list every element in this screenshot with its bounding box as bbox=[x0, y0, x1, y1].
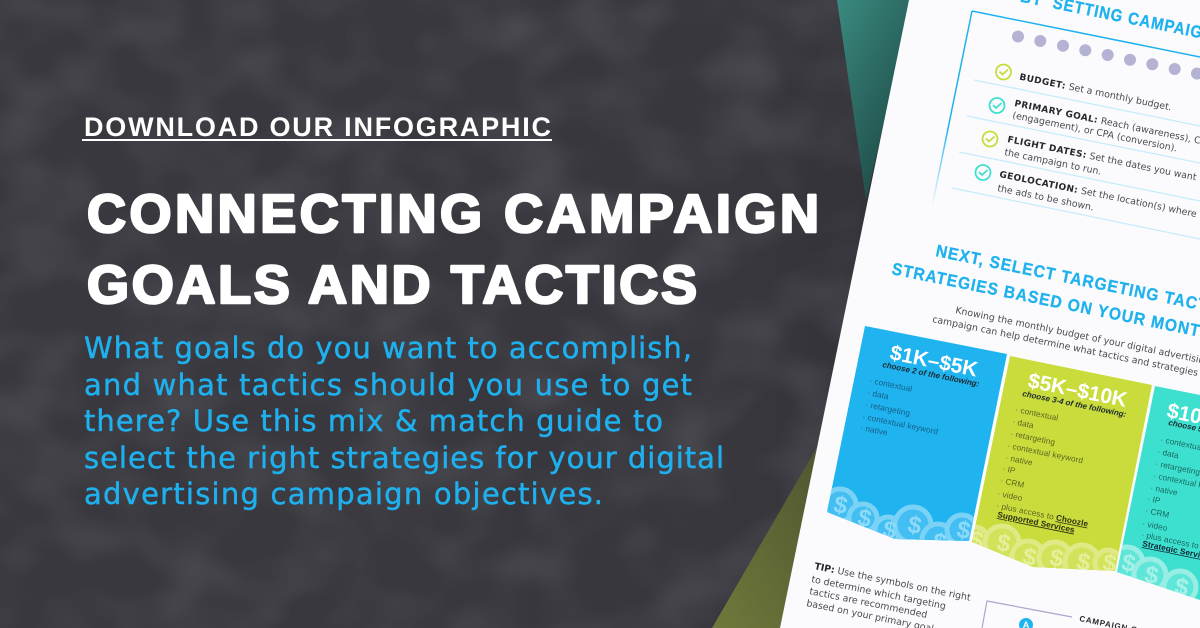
tip text: TIP: Use the symbols on the right bbox=[813, 561, 972, 604]
flight dates item: FLIGHT DATES: Set the dates you want bbox=[1006, 134, 1198, 183]
panel: $5K-$10K budget: $ bbox=[1020, 543, 1039, 572]
subtitle paragraph: and what tactics should you use to get bbox=[84, 368, 692, 402]
primary goal item: (engagement), or CPA (conversion). bbox=[1011, 110, 1178, 154]
panel: $5K-$10K budget: · retargeting bbox=[1010, 429, 1056, 447]
icon: budget check bbox=[996, 64, 1011, 80]
panel: $5K-$10K budget: $ bbox=[1074, 548, 1093, 577]
panel: $1K-$5K budget: · data bbox=[867, 388, 890, 401]
panel: $10K+ budget bbox=[1111, 386, 1200, 603]
eyebrow: download our infographic: DOWNLOAD OUR INFOGRAPHIC bbox=[84, 112, 551, 142]
document heading: campaign basics bbox=[961, 0, 1200, 58]
panel: $10K+ budget: · native bbox=[1150, 483, 1179, 498]
panel: $1K-$5K budget: choose 2 of the following: bbox=[882, 360, 980, 389]
panel: $1K-$5K budget: $ bbox=[954, 516, 973, 545]
olive background shape bbox=[712, 442, 820, 628]
intro paragraph: campaign can help determine what tactics and strategies bbox=[931, 314, 1199, 379]
icon: flight dates check bbox=[982, 132, 998, 146]
icon: geolocation check bbox=[976, 165, 990, 180]
panel: $10K+ budget: · video bbox=[1142, 519, 1169, 533]
panel: $5K-$10K budget bbox=[962, 356, 1152, 579]
panel: $1K-$5K budget: · retargeting bbox=[865, 400, 911, 418]
panel: $5K-$10K budget: · contextual keyword bbox=[1007, 441, 1084, 465]
panel: $5K-$10K budget: · CRM bbox=[1000, 476, 1025, 490]
panel: $1K-$5K budget: $ bbox=[930, 528, 949, 557]
panel: $5K-$10K budget: $ bbox=[967, 526, 986, 555]
panel: $5K-$10K budget: $ bbox=[1047, 544, 1066, 573]
panel: $5K-$10K budget: $ bbox=[1100, 549, 1119, 578]
panel: $1K-$5K budget: $1K–$5K bbox=[888, 341, 980, 382]
teal background shape bbox=[837, 0, 912, 200]
panel: $1K-$5K budget: · contextual keyword bbox=[862, 412, 939, 436]
panel: $1K-$5K budget: $ bbox=[905, 511, 924, 540]
flight dates item: the campaign to run. bbox=[1003, 147, 1102, 178]
panel: $5K-$10K budget: · contextual bbox=[1015, 405, 1059, 423]
panel: $5K-$10K budget: · IP bbox=[1002, 464, 1017, 476]
panel: $10K+ budget: · IP bbox=[1147, 494, 1162, 506]
panel: $5K-$10K budget: · video bbox=[997, 489, 1024, 503]
tip text: tactics are recommended bbox=[808, 586, 928, 621]
campaign goal legend box bbox=[982, 601, 1158, 628]
panel: $10K+ budget: · CRM bbox=[1145, 506, 1170, 520]
tip text bbox=[805, 561, 972, 628]
subtitle paragraph: What goals do you want to accomplish, bbox=[84, 331, 692, 365]
geolocation item: the ads to be shown. bbox=[996, 183, 1095, 214]
panel: $1K-$5K budget: · contextual bbox=[869, 376, 913, 394]
subtitle paragraph: advertising campaign objectives. bbox=[84, 477, 603, 511]
subtitle paragraph bbox=[84, 331, 724, 511]
title: GOALS AND TACTICS bbox=[87, 255, 697, 315]
panel: $1K-$5K budget bbox=[824, 326, 1007, 557]
budget item: BUDGET: Set a monthly budget. bbox=[1018, 72, 1173, 113]
geolocation item: GEOLOCATION: Set the location(s) where bbox=[998, 169, 1198, 220]
panel: $10K+ budget: $ bbox=[1119, 549, 1138, 578]
panel: $5K-$10K budget: choose 3-4 of the following: bbox=[1022, 389, 1127, 419]
subtitle paragraph: there? Use this mix & match guide to bbox=[84, 404, 663, 438]
panel: $1K-$5K budget: $ bbox=[831, 491, 850, 520]
panel: $1K-$5K budget: · native bbox=[860, 423, 889, 438]
panel: $1K-$5K budget: $ bbox=[880, 516, 899, 545]
infographic document sheet bbox=[780, 0, 1200, 628]
panel: $5K-$10K budget: · plus access to Choozle bbox=[996, 501, 1089, 529]
panel: $10K+ budget: $ bbox=[1142, 561, 1161, 590]
panel: $10K+ budget: $ bbox=[1172, 573, 1191, 602]
title: CONNECTING CAMPAIGN bbox=[87, 184, 819, 244]
panel: $5K-$10K budget: $5K–$10K bbox=[1026, 369, 1129, 412]
panel: $1K-$5K budget: $ bbox=[855, 504, 874, 533]
panel: $10K+ budget: · retargeting bbox=[1155, 459, 1200, 477]
icon: primary goal check bbox=[990, 98, 1004, 113]
panel: $5K-$10K budget: · data bbox=[1012, 417, 1035, 430]
subtitle paragraph: select the right strategies for your digital bbox=[84, 441, 724, 475]
tip text: to determine which targeting bbox=[810, 574, 947, 612]
panel: $5K-$10K budget: Supported Services bbox=[997, 510, 1076, 535]
panel: $10K+ budget: · data bbox=[1157, 447, 1180, 460]
panel: $5K-$10K budget: · native bbox=[1005, 453, 1034, 468]
panel: $5K-$10K budget: $ bbox=[994, 529, 1013, 558]
title bbox=[87, 184, 819, 315]
campaign basics checklist box bbox=[932, 11, 1200, 239]
